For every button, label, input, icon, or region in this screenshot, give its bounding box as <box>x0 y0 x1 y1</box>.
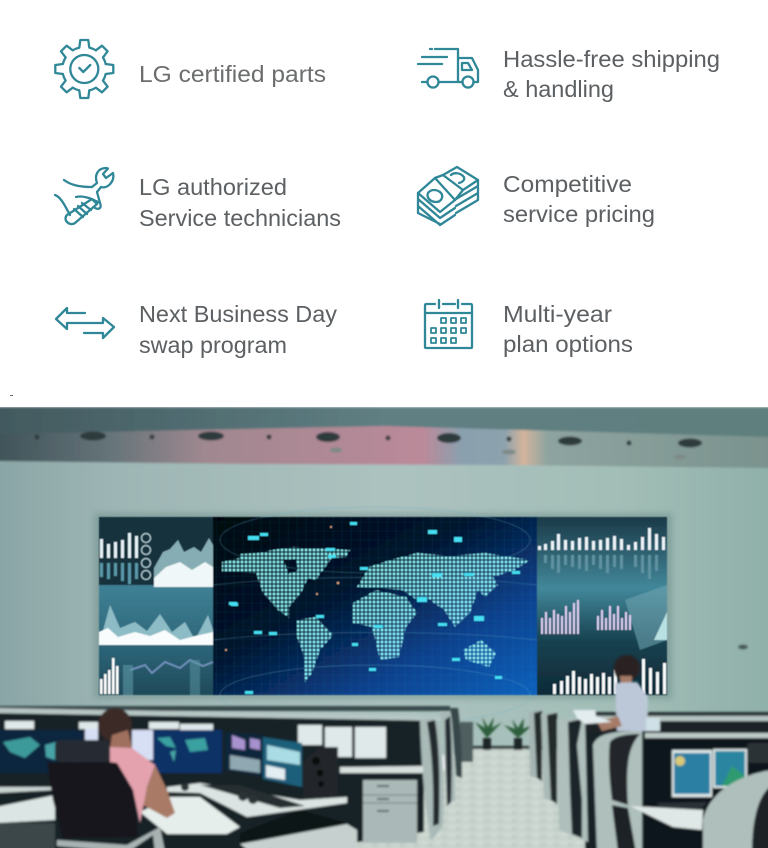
text: LG certified parts: LG certified parts <box>139 61 326 87</box>
wall <box>0 455 768 755</box>
left panel <box>99 517 213 695</box>
text: Next Business Day swap program: Next Business Day <box>139 301 337 327</box>
world map panel <box>213 507 537 725</box>
screen glow <box>94 513 672 699</box>
icon: delivery truck <box>418 49 478 88</box>
desk surfaces <box>0 783 357 848</box>
photo: room shell <box>0 407 768 755</box>
standing operator <box>573 655 660 731</box>
map dots <box>222 547 530 682</box>
icon: stack of money <box>418 167 478 225</box>
icon: calendar <box>425 300 472 348</box>
icon: swap arrows <box>56 308 114 338</box>
small mark <box>10 395 13 396</box>
right desk <box>630 806 703 830</box>
far console pillars <box>420 708 462 841</box>
text: Next Business Day swap program: swap program <box>139 332 287 358</box>
icon: hand holding wrench <box>55 168 113 224</box>
foreground console <box>703 770 768 848</box>
text: Hassle-free shipping & handling <box>503 46 720 102</box>
text: Next Business Day swap program <box>139 301 337 358</box>
speaker tower <box>303 747 338 798</box>
seated operator <box>98 708 175 823</box>
text: Competitive service pricing: service pricing <box>503 201 655 227</box>
back white monitors <box>5 721 386 758</box>
icon: gear with check <box>55 40 113 98</box>
text: Multi-year plan options <box>503 301 633 357</box>
text: Multi-year plan options: plan options <box>503 331 633 357</box>
text: LG authorized Service technicians: LG authorized <box>139 174 287 200</box>
text: Competitive service pricing: Competitive <box>503 171 632 197</box>
plants <box>460 717 534 762</box>
near pillar <box>593 731 642 848</box>
video wall <box>99 507 667 725</box>
white mask above photo <box>0 397 768 407</box>
wall camera <box>738 644 748 650</box>
chart monitors <box>225 732 302 787</box>
far pillars <box>529 710 588 842</box>
map monitors <box>0 729 222 773</box>
left console row <box>0 706 462 848</box>
text: Multi-year plan options: Multi-year <box>503 301 612 327</box>
text: Competitive service pricing <box>503 171 655 227</box>
text: LG authorized Service technicians: Service technicians <box>139 205 341 231</box>
photo: foreground consoles <box>0 655 768 848</box>
text: Hassle-free shipping & handling: & handling <box>503 76 614 102</box>
ceiling <box>0 407 768 468</box>
right monitors <box>657 743 768 811</box>
right panel <box>537 517 667 695</box>
floor <box>330 748 610 848</box>
right console row <box>529 655 768 848</box>
text: LG authorized Service technicians <box>139 174 341 231</box>
chair <box>47 740 165 848</box>
text: Hassle-free shipping & handling: Hassle-free shipping <box>503 46 720 72</box>
right worktop and cabinet <box>340 766 423 843</box>
